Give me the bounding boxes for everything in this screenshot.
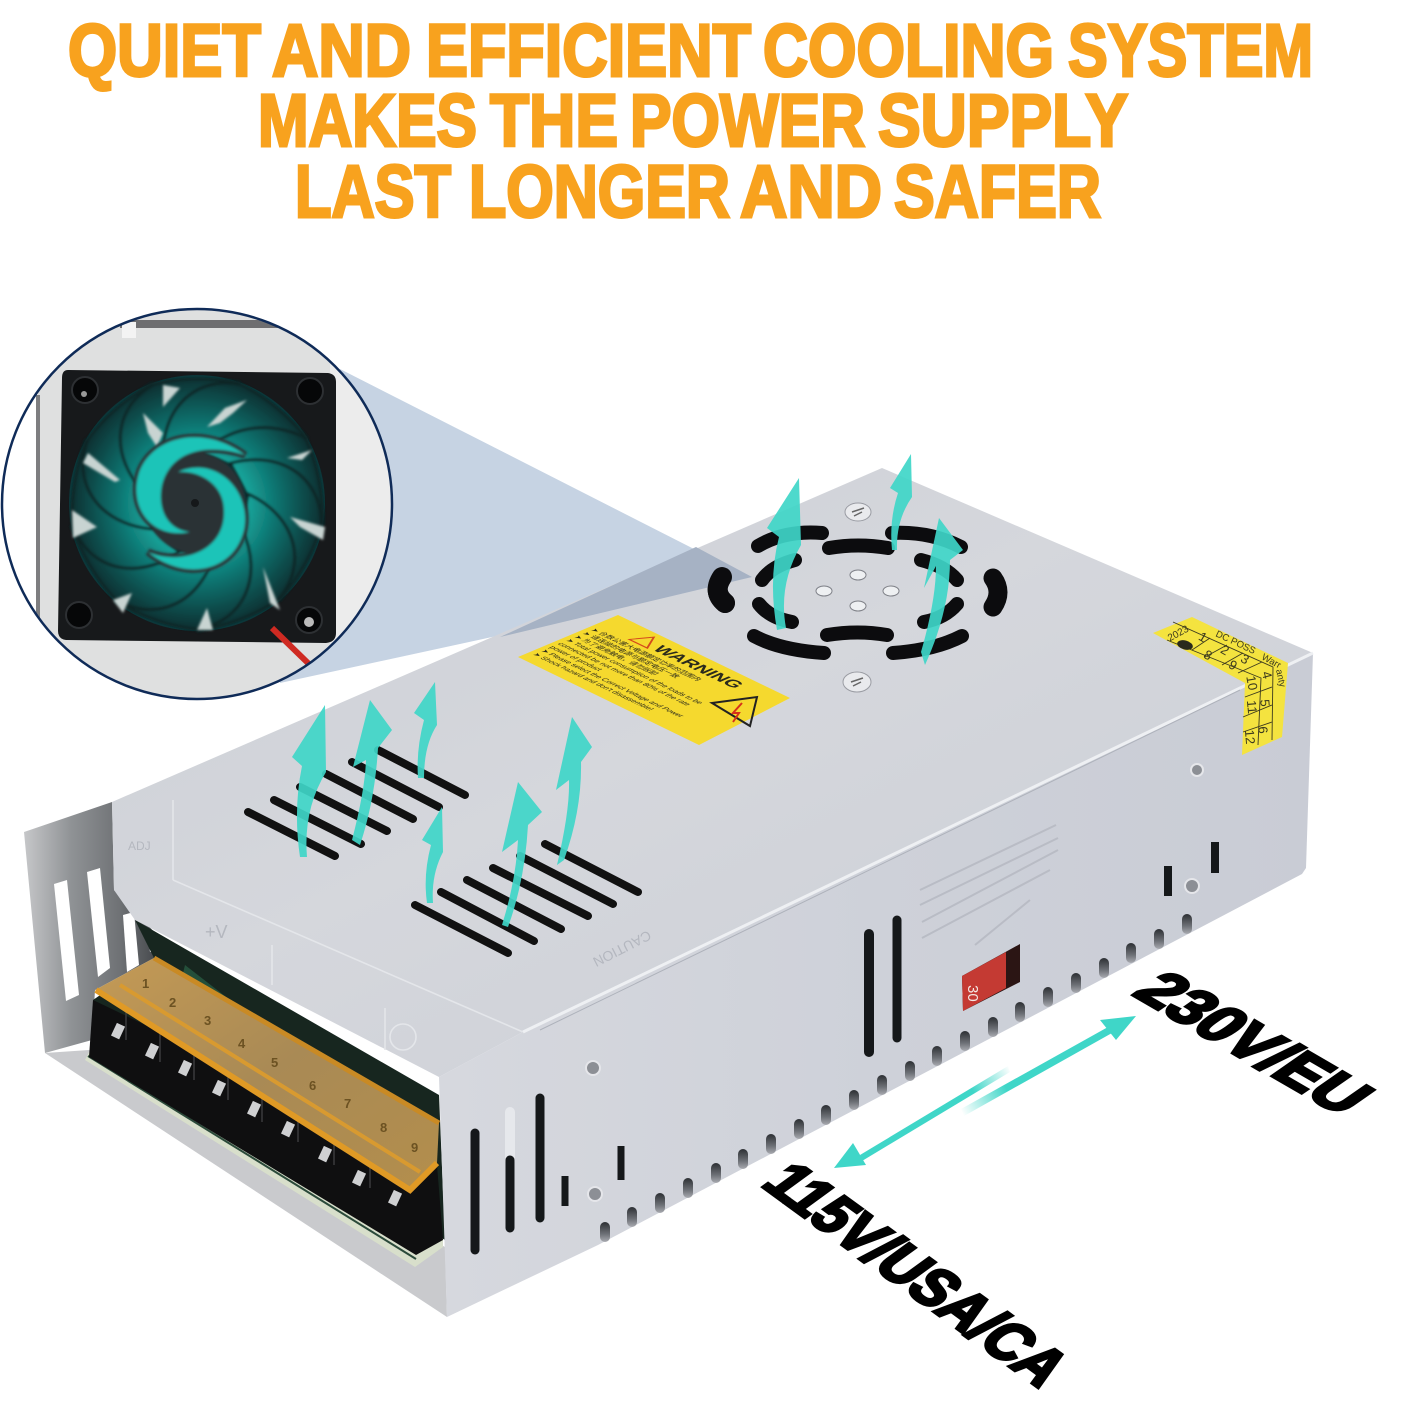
warning label: WARNING [648,644,748,691]
warranty label: 8 [1201,647,1215,663]
transparent amber terminal cover: 7 [344,1096,351,1111]
warranty label: 9 [1226,657,1240,673]
fan wire [272,628,310,665]
bottom plate [45,1050,447,1317]
voltage selector switch [962,944,1020,1011]
arrow: vent one [292,705,326,857]
title: LAST [295,150,451,233]
interior [93,920,445,1240]
engraved caution text: ADJ [128,839,151,853]
mounting holes [586,764,1203,1201]
title: EFFICIENT [426,9,751,92]
top cover [112,468,1313,1077]
arrow: fan two [890,454,912,550]
title: QUIET [68,9,261,92]
title: SUPPLY [878,79,1128,162]
voltage selector switch: 30 [964,985,981,1002]
warranty label: 12 [1242,729,1258,745]
title: LONGER [469,150,730,233]
warning label: ➤ 请连接的电源与额定电压一致 [580,631,683,679]
terminal block [89,1000,443,1255]
title: SYSTEM [1068,9,1313,92]
top vent group one [248,750,465,856]
warranty label: 2023 [1166,624,1191,644]
side vents [475,842,1215,1250]
seam highlight [523,653,1313,1032]
fan rotor [69,375,325,632]
front lip engraving [173,800,523,1050]
transparent amber terminal cover: 2 [169,995,176,1010]
arrow: vent three [414,682,437,778]
blades [70,376,325,632]
warranty label: 11 [1244,700,1260,714]
fan frame [58,370,336,643]
transparent amber terminal cover: 8 [380,1120,387,1135]
screws and rivets [816,503,899,692]
transparent amber terminal cover [95,958,439,1190]
warning label: ➤ 为了避免触电，请勿拆卸 [572,634,661,676]
title: AND [272,9,411,92]
title: COOLING [763,9,1054,92]
arrow: fan one [767,478,801,630]
magnified fan lens [0,300,400,710]
side panel [439,653,1313,1317]
warranty label: 5 [1257,699,1273,707]
arrow: vent six [556,717,592,865]
warranty label: 6 [1255,726,1271,734]
airflow arrows [292,454,963,927]
title: THE [490,79,618,162]
title: POWER [630,79,865,162]
warranty label: anty [1273,668,1288,688]
transparent amber terminal cover: 5 [271,1055,278,1070]
power supply unit [24,468,1313,1317]
warning label: ➤ Total power consumption of the loads to be [564,638,706,705]
warranty label: Warr [1260,652,1283,671]
callout cone: light part [280,369,755,683]
double-headed voltage arrow [834,1016,1136,1168]
label: 230V/EU: 230V/EU [1119,962,1388,1125]
arrow: fan three [921,518,963,665]
warranty label: 10 [1243,675,1261,691]
warranty label: DC POSS [1214,629,1257,657]
transparent amber terminal cover: 3 [204,1013,211,1028]
transparent amber terminal cover: 6 [309,1078,316,1093]
warning label: ➤ Please select the Correct Voltage and Power [539,648,687,719]
callout cone: overlap on top of unit [500,547,752,637]
title: SAFER [894,150,1101,233]
bottom edge teeth [600,914,1192,1242]
warranty label: 4 [1259,670,1275,680]
warranty label: 3 [1238,651,1252,667]
left end wall [24,802,160,1053]
warranty label: 1 [1196,629,1210,645]
title [68,9,1313,233]
transparent amber terminal cover: 1 [142,976,149,991]
PCB edge [85,1052,443,1267]
transparent amber terminal cover: 4 [238,1036,246,1051]
arrow: vent five [502,782,542,927]
title: MAKES [258,79,477,162]
fan grille [718,533,998,653]
warning label: ➤ Shock hazard and don't disassemble! [531,652,657,712]
faint side markings [920,825,1058,945]
warning label: connected be not more than 80% of the rate [555,641,693,707]
engraved caution text [128,839,654,970]
warranty label [1153,617,1288,755]
warning label [518,615,790,745]
warning label: ➤ 合数公害大电源额定功率的范围内 [588,627,704,682]
spiral hub [136,437,245,569]
engraved caution text: +V [205,922,228,942]
light streaks behind blades [72,385,325,630]
engraved caution text: CAUTION [591,927,654,970]
warranty label: 2 [1218,642,1232,658]
arrow: vent two [352,700,392,845]
transparent amber terminal cover: 9 [411,1140,418,1155]
top vent group two [415,844,638,953]
title: AND [740,150,882,233]
arrow: vent four [422,807,443,903]
warning label: power of product [547,645,605,672]
